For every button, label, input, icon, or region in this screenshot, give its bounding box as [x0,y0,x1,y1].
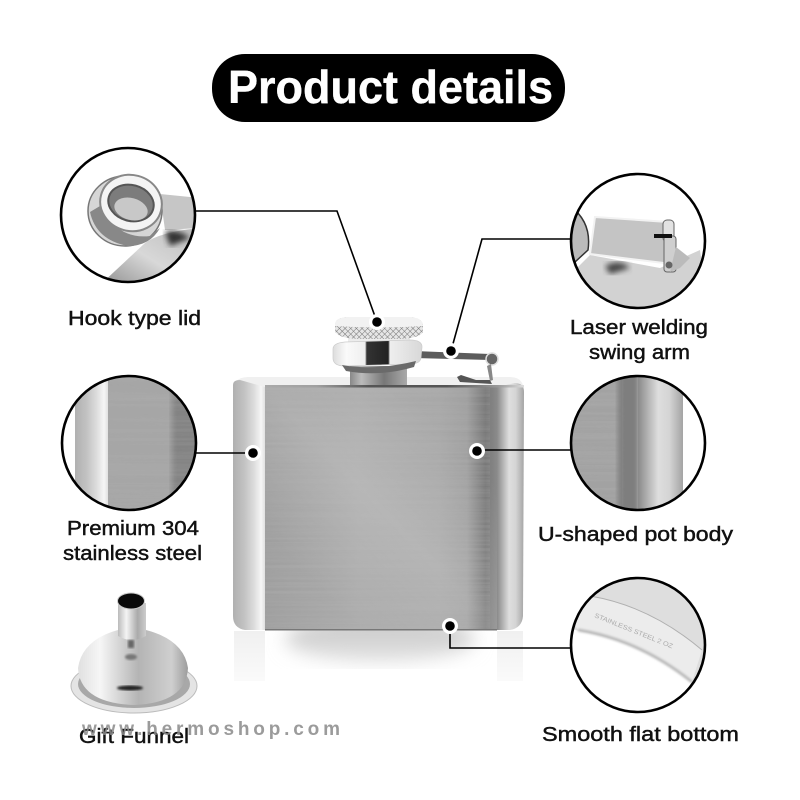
knurled lid [335,317,423,339]
label: laser welding swing arm: swing arm [589,342,690,364]
connector: flat bottom [442,618,571,648]
lid collar [348,336,410,346]
funnel rim [71,659,197,713]
flask left side panel [233,380,265,630]
lid lower lip [342,361,416,373]
detail circle: flat bottom [565,570,710,712]
flask top face [233,377,524,392]
connector: stainless steel [196,445,261,461]
label: smooth flat bottom: Smooth flat bottom [542,724,739,746]
connector: hook type lid [195,211,385,330]
detail circle: hook type lid [61,148,200,290]
title pill: Product details [228,61,553,113]
flask right side panel [497,383,524,630]
watermark: www.hermoshop.com [81,719,340,740]
connector: u-shaped body [469,443,571,459]
engraved mark: STAINLESS STEEL 2 OZ [593,612,674,650]
flask illustration [232,317,526,703]
flask neck [350,366,407,385]
detail circle: swing arm [570,172,706,310]
funnel [71,593,197,713]
label: premium stainless steel [63,518,202,565]
funnel cone [78,603,188,705]
label: gift funnel: Gift Funnel [79,726,189,748]
lid ring [333,340,422,366]
detail circle: stainless steel [60,374,198,512]
label: laser welding swing arm [570,317,708,364]
swing arm [414,351,498,381]
flask front panel [265,385,524,630]
label: hook type lid: Hook type lid [68,308,201,330]
connector: swing arm [443,239,571,359]
label: laser welding swing arm: Laser welding [570,317,708,339]
label: premium stainless steel: stainless steel [63,543,202,565]
flask clasp [457,375,492,384]
label: premium stainless steel: Premium 304 [67,518,199,540]
funnel spout opening [118,593,144,609]
flask reflection [232,616,526,703]
label: u-shaped pot body: U-shaped pot body [538,524,733,546]
detail circle: u-shaped body [570,374,706,512]
